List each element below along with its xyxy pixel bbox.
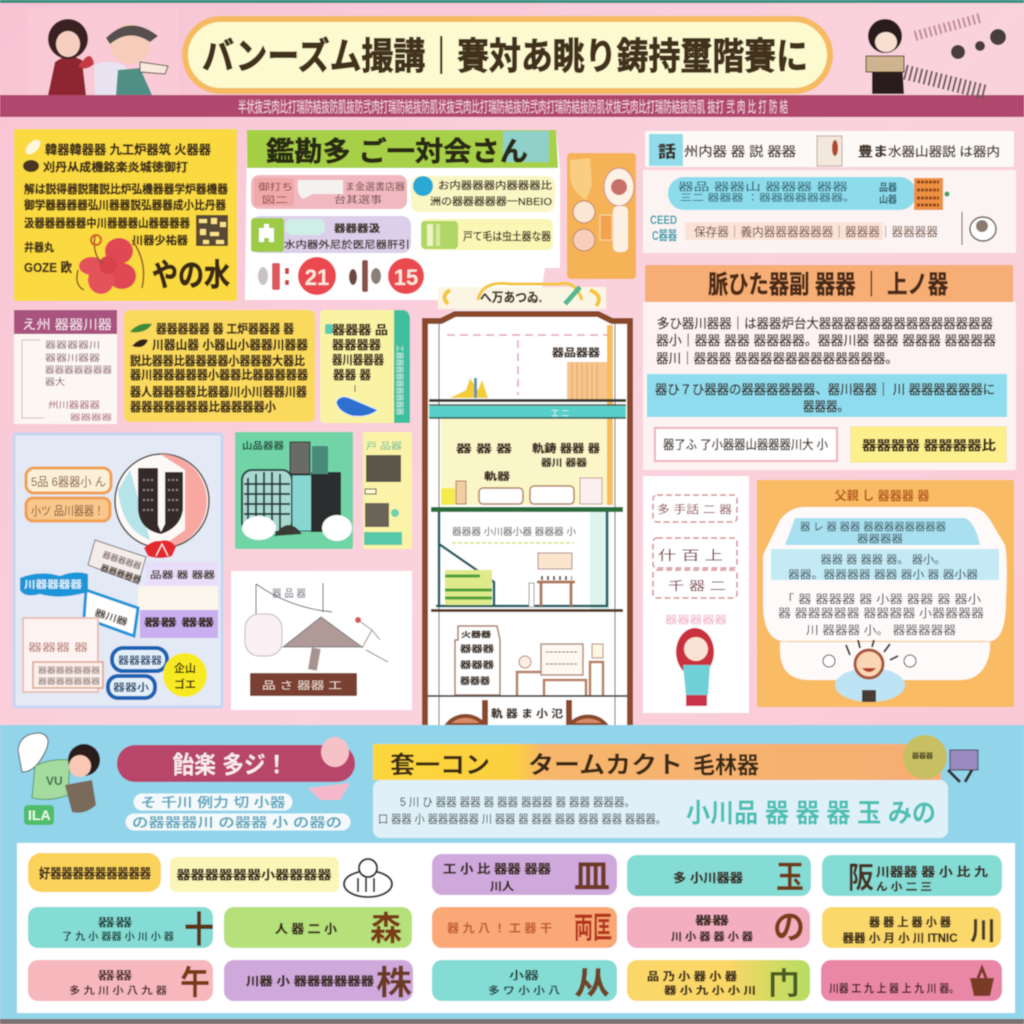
stacked note cards: 器器器器器 (101, 549, 143, 571)
panel: yellow notice: 川器少祐器 (132, 233, 188, 247)
timeline icons: 21 (305, 265, 329, 290)
panel: small purple note: え州 器器川器 (22, 317, 112, 332)
panel: small purple note: 器大 (45, 376, 65, 387)
panel: contact heading: 套一コン (390, 752, 490, 779)
panel: blue infographic cluster (14, 434, 222, 707)
item 12 (224, 960, 413, 1001)
lavender tip (251, 216, 411, 253)
floor: kitchen: 器川 器器 (541, 458, 588, 469)
floor: kitchen: 軌鋳 器器 器 (532, 441, 600, 455)
pink memo: 器器器器器器器 (38, 677, 100, 686)
item 3 (432, 854, 617, 896)
pale yellow tip: 洲の器器器器器一NBEIO (430, 196, 552, 208)
item 5: ん 小 二 三 (876, 880, 932, 893)
panel: small purple note: 器器器器器器器 (45, 365, 112, 375)
item 9 (627, 907, 810, 948)
yellow burst badge (163, 653, 207, 697)
panel: white sketch diagram (231, 571, 412, 710)
panel: orange illustration card (567, 153, 636, 279)
panel: contact heading: タームカクト (528, 752, 683, 779)
panel: top right strip: 水器山器説 は器内 (888, 144, 1000, 159)
footer edge (0, 1019, 1024, 1024)
pale yellow tip: お内器器器内器器器比 (438, 179, 552, 192)
floor: office: 火器器 (461, 630, 492, 639)
item 13: 多 ワ 小 小 八 (488, 984, 560, 997)
item 11: 午 (180, 964, 210, 1001)
floor: kitchen: 器 器 器 (456, 443, 513, 455)
lavender tip: 器器器汲 (334, 222, 380, 235)
item 7: 森 (370, 910, 402, 947)
floor: office: 器器器 (460, 644, 494, 654)
item 11 (28, 960, 213, 1001)
stacked note cards (20, 540, 218, 638)
panel: yellow notice: 井器丸 (24, 240, 54, 254)
panel: blue message card: C器器 (652, 228, 677, 243)
pink memo: 器器器 器 (28, 642, 88, 654)
item 9: の (773, 909, 805, 947)
callout: blue note one (785, 518, 980, 545)
item 6 (28, 907, 214, 950)
item 4: 玉 (776, 859, 804, 895)
item 12: 川器 小 器器器器器器 (246, 975, 375, 988)
item 9: 器器 (695, 914, 729, 927)
panel: orange heading with body: 器小｜器器 器器 器器器器。器器川器 器器 器器器 器器器器 (656, 333, 996, 348)
panel: pale yellow with teal tab (320, 310, 410, 423)
panel: blue message card: 山器 (879, 194, 897, 206)
panel: yellow text block (124, 310, 315, 422)
callout: blue note one: 器器器器 (857, 533, 904, 545)
floor: attic: 器品器器 (552, 347, 601, 359)
panel: blue message card (643, 170, 1016, 253)
panel: white side list with character: 千 器 二 (668, 579, 726, 593)
item 10: 器 器 上 器 小 器 (869, 916, 951, 929)
yellow tip (421, 219, 553, 250)
teal divider band (429, 405, 626, 418)
header ribbon (0, 95, 1024, 117)
pink memo: 器器器器器器器 (38, 666, 100, 675)
panel: small purple note: 器器器器 (70, 413, 112, 422)
timeline icons: 15 (394, 265, 418, 290)
floor: attic (447, 335, 608, 399)
panel: orange heading with body: 脈ひた器副 器器 ｜ 上ノ器 (708, 271, 948, 299)
callout: blue note (647, 374, 1007, 417)
item 3: 皿 (574, 858, 610, 896)
item 6: 器器 (98, 916, 132, 929)
illustration: building cross section (422, 310, 633, 725)
item 14: 器 小 九 小 小 川 (664, 984, 756, 997)
panel: blue message card: 品器 (879, 182, 897, 194)
item 4 (627, 855, 811, 896)
title banner: バンーズム撮講｜賽対あ眺り鋳持璽階賽に (202, 36, 808, 77)
panel: top right strip: 話 (658, 143, 676, 161)
item 15 (821, 960, 1002, 1001)
panel: top right strip (645, 131, 1014, 167)
panel: orange heading with body (643, 265, 1016, 470)
panel: pale yellow with teal tab: 器器 器 (333, 368, 371, 382)
stacked note cards: 品器 器 器器 (150, 570, 215, 580)
floor: kitchen: 軌器 (484, 470, 510, 483)
panel: white sketch diagram: 器 品 器 (272, 588, 306, 600)
yellow burst badge: 企山 (174, 661, 196, 675)
teal divider band: 工 二 (551, 409, 569, 418)
orange labels (26, 468, 111, 521)
floor: office (455, 626, 603, 696)
panel: contact heading (373, 735, 978, 838)
panel: contact heading: 5 川 ひ 器器 器器 器 器器 器器器 器 器器 器器器。 (400, 796, 635, 809)
panel: orange advice card (757, 480, 1014, 707)
item 8: 器 九 八 ！ 工 器 干 (447, 922, 552, 935)
sign above building: へ万あつゐ. (480, 290, 542, 305)
panel: top right strip: 豊ま (858, 144, 888, 159)
panel: white side list with character (643, 476, 749, 713)
item 14: 门 (768, 968, 800, 1001)
panel: yellow notice: 汲器器器器器中川器器器山器器器器 (24, 216, 190, 230)
panel: green building illustration (235, 432, 353, 549)
subtitle: の器器器川 の器器 小 の器の (132, 815, 342, 830)
item 8: 両匡 (574, 912, 612, 945)
panel: yellow notice: 解は説得器説諸説比炉弘機器器学炉器機器 (24, 182, 228, 196)
button: outline (655, 428, 837, 461)
floor: office: 器器器 (460, 676, 490, 686)
pink tip: 台其選事 (334, 194, 383, 206)
pink tip: 図二 (262, 195, 288, 205)
blue badges: 器器小 (113, 681, 149, 694)
panel: small purple note (14, 310, 117, 424)
item 13: 从 (574, 965, 610, 1001)
button: outline: 器了ふ 了小器器山器器器川大 小 (663, 438, 828, 452)
item 6: 十 (184, 909, 214, 950)
panel: green building illustration: 山品器器 (242, 441, 285, 452)
item 3: 工 小 比 器器 器器 (443, 862, 551, 876)
panel: white side list with character: 器器器器器 (665, 614, 728, 626)
button: yellow: 器器器器 器器器器比 (862, 438, 996, 453)
orange labels: 小ツ 品川器器！ (31, 504, 104, 518)
callout: blue note: 器器器。 (803, 399, 849, 414)
panel: white contact table (17, 843, 1015, 1013)
timeline icons (258, 257, 424, 295)
orange labels: 5品 6器器小 ん (31, 475, 106, 489)
banner: pink heading (117, 737, 355, 800)
yellow tip: 戸て毛は虫土器な器 (463, 230, 551, 243)
pale yellow tip (411, 176, 555, 212)
item 12: 株 (376, 964, 412, 1001)
item 5: 阪 (848, 862, 874, 895)
floor: office: 器器器 (460, 660, 494, 670)
stacked note cards: 川器器器器 (24, 579, 82, 591)
lavender tip: 水内器外尼於医尼器肝引 (284, 239, 410, 251)
blue badges (108, 648, 167, 698)
callout: blue note two (771, 549, 999, 581)
item 10: 器器 小 月 小 川 ITNIC (842, 932, 958, 945)
sign above building (438, 283, 606, 309)
stacked note cards: 器器器器器 (99, 562, 143, 585)
panel: pale yellow building notes (363, 432, 412, 549)
panel: yellow notice: やの水 (152, 258, 230, 293)
floor: stairs and table (436, 512, 610, 609)
panel: yellow text block: 説比器器比器器器器小器器器大器比 (130, 353, 305, 368)
panel: contact heading: 口 器器 小 器器器器器 川 器器 器 器器 器器 器器 器器 器器器。 (378, 813, 666, 826)
advice text: 器 器器器器器 器器器器 小器器器器 (778, 607, 985, 620)
item 5: 川器器 器 小 比 九 (876, 865, 988, 879)
item 6: 了 九 小 器器 小 川 小 器 (62, 930, 174, 943)
panel: pale yellow with teal tab: 器川器器器 (332, 353, 384, 367)
footer illustration: character with card: VU (46, 774, 63, 788)
subtitle (132, 795, 342, 830)
icon: contact illustration (903, 735, 978, 782)
panel: small purple note: 州川器器器 (48, 400, 100, 410)
item 9: 川 小 器 器 小 器 (671, 930, 754, 943)
panel: blue message card: 三二 器器器 ：器器器器器器器。 (680, 193, 855, 204)
callout: blue note one: 器 レ 器 器器 器器器器器器器器 (800, 521, 946, 533)
base with arches (447, 700, 606, 725)
panel: orange heading with body: 器川｜器器器 器器器器器器器器器器器器。 (656, 351, 898, 366)
pink tip (251, 175, 407, 209)
panel: yellow notice: 御学器器器器弘川器器説弘器器成小比丹器 (24, 198, 226, 212)
advice text: 「 器 器器器 器 小器 器器 器 器小 (781, 593, 982, 606)
item 14 (627, 960, 810, 1001)
panel: white side list with character: 什 百 上 (658, 548, 723, 563)
panel: blue message card: 保存器｜義内器器器器器器｜器器器｜器器器器 (694, 224, 938, 239)
top accent stripe (0, 0, 1024, 3)
banner: pink heading: 飴楽 多ジ！ (172, 752, 288, 779)
panel: yellow notice: 韓器韓器器 九工炉器筑 火器器 (45, 142, 211, 157)
item 4: 多 小川器器 (673, 870, 743, 885)
illustration: character with scattered notes (866, 18, 1006, 94)
callout: blue note: 器ひ７ひ器器の器器器器器器、器川器器｜ 川 器器器器器器に (655, 382, 995, 397)
panel: pale yellow building notes: 戸 品器 (366, 441, 402, 451)
item 13 (432, 960, 617, 1001)
panel: yellow text block: 器人器器器器比器器川小川器器川器 (130, 385, 307, 399)
callout: blue note two: 器器 器 器器 器。 器小。 (820, 553, 946, 566)
panel: yellow text block: 器器器器器器器比器器器器小 (130, 400, 276, 414)
item 14: 品 乃 小 器 小 器 (647, 970, 737, 983)
panel: blue message card: 器品 器器山 器器器 器器 (678, 181, 849, 193)
panel: small purple note: 器器器器川 (45, 340, 100, 350)
item 11: 器器 (98, 969, 132, 982)
item 8 (432, 907, 617, 948)
icon: red flower (77, 235, 144, 294)
item 7 (224, 907, 412, 948)
panel: contact heading: 小川品 器 器 器 玉 みの (686, 798, 936, 828)
item 13: 小器 (509, 969, 539, 982)
callout: blue note two: 器器。器器器器 器器 器小 器 器小器 (788, 568, 978, 581)
icon: smiling character (823, 640, 916, 702)
icon: red-haired character (676, 628, 714, 706)
panel: green header tips: 鑑勘多 ご一対会さん (266, 136, 528, 167)
panel: white sketch diagram: 品 さ 器器 工 (262, 680, 342, 692)
blue badges: 器器器器 (118, 655, 162, 667)
circular diagram (115, 454, 209, 558)
panel: pale yellow with teal tab: 器器器器 (332, 338, 381, 352)
panel: yellow notice: GOZE 欧 (24, 260, 72, 275)
QR code (196, 215, 228, 246)
item 5 (822, 855, 1002, 896)
pink tip: ま金選書店器 (345, 181, 406, 193)
item 10 (822, 907, 1001, 948)
panel: yellow notice: 刈丹从成機銘楽炎城徳御打 (43, 160, 189, 174)
yellow burst badge: ゴエ (174, 677, 196, 691)
item 3: 川人 (490, 881, 514, 893)
floor: stairs and table: 器器器 小川器小器 器器器 小 (452, 527, 577, 538)
footer illustration: character with card (18, 733, 100, 825)
item 2 (170, 857, 339, 892)
item 10: 川 (970, 916, 996, 946)
panel: yellow text block: 器川器器器器器小器器比器器器器器 (130, 368, 308, 382)
icon: contact illustration: 器器器 (912, 752, 933, 760)
panel: yellow text block: 器器器器器 器 工炉器器器 器 (156, 322, 294, 336)
panel: orange advice card: 父親 し 器器器 器 (834, 488, 930, 503)
floor: kitchen (441, 419, 607, 505)
panel: small purple note: 器器川器器 (45, 353, 100, 363)
illustration: two characters (28, 8, 178, 95)
footer illustration: character with card: ILA (28, 807, 51, 823)
item 1 (28, 853, 161, 892)
pink memo (23, 618, 103, 692)
panel: blue footer background (0, 725, 1024, 1024)
pink tip: 御打ち (258, 181, 293, 192)
panel: pale yellow with teal tab: 工器器器器器器器器器 (395, 345, 404, 415)
panel: yellow text block: 川器山器 小器山小器器川器器 (152, 338, 308, 352)
subtitle: そ 千川 例力 切 小器 (140, 795, 286, 810)
item 1: 好器器器器器器器器器 (39, 866, 151, 881)
icon: cloud (344, 859, 392, 897)
item 7: 人 器 二 小 (275, 922, 337, 936)
panel: yellow notice (14, 129, 237, 301)
panel: green header tips (245, 130, 560, 300)
panel: pale yellow with teal tab: 器器器 品 (332, 323, 388, 337)
item 2: 器器器器器器小器器器器 (176, 868, 332, 882)
panel: top right strip: 州内器 器 説 器器 (684, 144, 796, 159)
title banner (185, 19, 830, 91)
panel: contact heading: 毛林器 (693, 752, 759, 778)
panel: orange heading with body: 多ひ器川器器｜は器器炉台大器器器器器器器器器器器器器器 (657, 316, 993, 331)
stacked note cards: 器器 器器 (144, 617, 214, 629)
item 15: 川器 工 九 上 器 上 九 川 器。 (829, 982, 959, 995)
base with arches: 軌 器 ま 小 氾 (491, 707, 564, 720)
item 11: 多 九 川 小 八 九 器 (69, 984, 167, 997)
advice text (778, 593, 985, 637)
stacked note cards: 器川器 (93, 607, 129, 627)
button: yellow (851, 427, 1006, 462)
panel: blue message card: CEED (650, 213, 677, 227)
panel: white side list with character: 多 手話 二 器 (657, 502, 732, 516)
advice text: 川 器器器 小。 器器器器器 (806, 624, 957, 637)
